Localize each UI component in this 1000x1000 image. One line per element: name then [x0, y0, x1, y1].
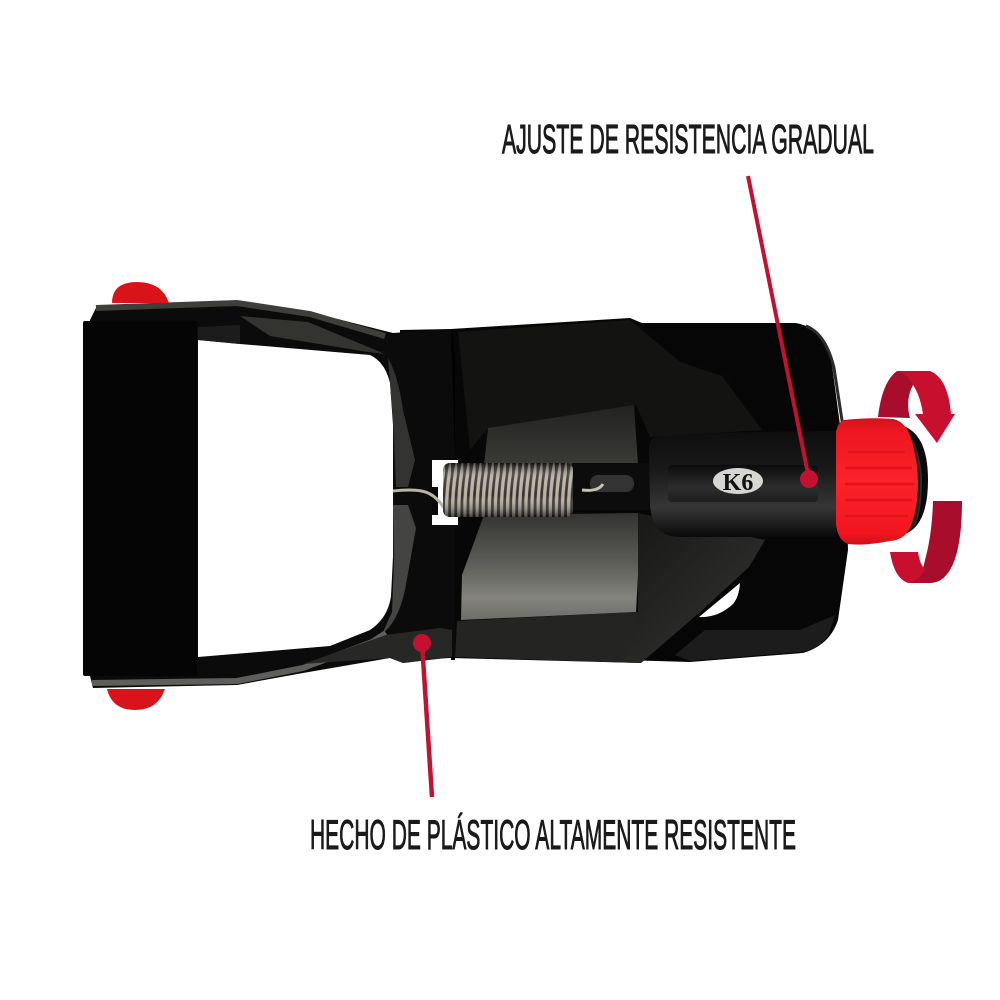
arrow band back	[908, 501, 962, 583]
K6 logo: K6	[723, 470, 753, 496]
spring window	[432, 460, 458, 525]
front panel body	[400, 318, 765, 663]
case edge highlights	[806, 326, 845, 440]
tube	[649, 431, 836, 537]
foam grip	[83, 321, 197, 676]
wire hook	[393, 490, 446, 511]
arrow band front	[890, 552, 925, 583]
lower inner rim	[382, 505, 416, 634]
shaft slot	[590, 475, 634, 492]
spring hook end	[582, 484, 603, 490]
arrow band front with head	[897, 371, 955, 443]
handle frame	[90, 302, 455, 688]
arrow band back	[878, 371, 913, 418]
lower fabric panel	[461, 513, 638, 620]
rotation arrow: top	[878, 371, 955, 443]
right fabric fold	[620, 513, 765, 663]
white cutout	[699, 583, 740, 617]
red end cap bottom	[107, 689, 165, 710]
ring inner	[912, 440, 921, 526]
bottom fabric panel	[455, 612, 699, 663]
spring	[443, 463, 573, 517]
upper right dark fabric	[458, 320, 762, 450]
top arm inner sheen	[240, 316, 385, 354]
upper fabric panel	[484, 405, 638, 465]
knob ridges	[845, 452, 914, 516]
callout: top pointer	[748, 176, 818, 488]
bottom arm sheen	[303, 628, 452, 664]
red end cap top	[112, 282, 169, 303]
rotation arrow: bottom	[890, 501, 962, 583]
rear case	[620, 323, 848, 662]
top arm rim	[96, 303, 385, 336]
K6 logo	[713, 468, 763, 496]
black cap ring	[890, 425, 928, 535]
product: hand grip device	[83, 282, 928, 710]
bottom arm rim	[92, 633, 386, 683]
callout: bottom pointer	[413, 634, 432, 797]
inner rim of frame	[388, 358, 415, 487]
frame top sheen	[198, 325, 240, 344]
shaft	[572, 463, 652, 510]
tube label inset	[668, 465, 818, 502]
case lower sheen	[675, 615, 835, 661]
divider notch	[451, 329, 455, 660]
red knob	[836, 418, 918, 545]
